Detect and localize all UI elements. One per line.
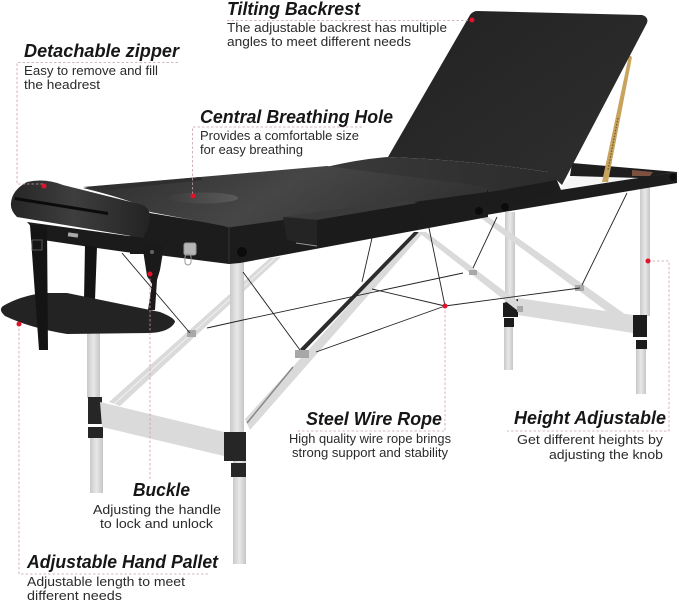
knobs: [237, 174, 676, 257]
breathing hole: [168, 192, 238, 204]
callout: buckle: Adjusting the handle: [93, 502, 221, 517]
left back leg: [87, 330, 103, 493]
front left leg: [224, 258, 246, 564]
back middle leg: [503, 212, 518, 370]
callout: tilting backrest: [227, 0, 447, 49]
callout: tilting backrest: The adjustable backrest has multiple: [227, 20, 447, 35]
callout: detachable zipper: Detachable zipper: [24, 41, 180, 61]
callout: central breathing hole: Central Breathing Hole: [200, 107, 393, 127]
adjustable hand pallet back strap: [84, 245, 97, 300]
callout: adjustable hand pallet: [26, 552, 219, 602]
adjustable hand pallet: [1, 293, 175, 334]
callout: central breathing hole: [200, 107, 393, 157]
callout: buckle: Buckle: [133, 480, 190, 500]
tilting backrest cushion: [388, 11, 647, 185]
callout: adjustable hand pallet: Adjustable Hand Pallet: [26, 552, 219, 572]
callout: tilting backrest: angles to meet different needs: [227, 34, 412, 49]
callout: central breathing hole: Provides a comfortable size: [200, 128, 359, 143]
zipper hook: [184, 243, 196, 265]
seat section cushion: [326, 157, 561, 215]
central table section: [83, 166, 488, 264]
left diagonal brace: [109, 257, 281, 406]
callout: height adjustable: Get different heights by: [517, 432, 664, 447]
callout: steel wire rope: Steel Wire Rope: [306, 409, 442, 429]
callout: height adjustable: adjusting the knob: [549, 447, 663, 462]
callout: steel wire rope: strong support and stability: [292, 445, 448, 460]
steel wire ropes: [122, 193, 627, 352]
straps: [30, 225, 48, 350]
callout: detachable zipper: the headrest: [24, 77, 100, 92]
centre brace lower: [245, 232, 424, 430]
far right leg: [633, 186, 650, 394]
centre brace right: [418, 232, 520, 311]
callout: steel wire rope: High quality wire rope brings: [289, 431, 451, 446]
rear frame: [486, 163, 677, 215]
callout: detachable zipper: Easy to remove and fill: [24, 63, 158, 78]
wooden support strut: [602, 55, 632, 182]
callout: height adjustable: Height Adjustable: [514, 408, 666, 428]
bolster pillow: [283, 200, 418, 246]
callout: detachable zipper: [24, 41, 180, 92]
buckle: [143, 243, 163, 310]
front rail: [100, 402, 224, 456]
table legs and frame: [87, 186, 650, 564]
callout: central breathing hole: for easy breathing: [200, 142, 303, 157]
back rail right: [518, 298, 633, 333]
callout: steel wire rope: [289, 409, 451, 460]
callout: height adjustable: [514, 408, 666, 462]
callout: buckle: to lock and unlock: [100, 516, 214, 531]
headrest: [11, 177, 203, 254]
callout: buckle: [93, 480, 221, 531]
brace brackets: [187, 270, 584, 358]
marker dots: [16, 18, 650, 326]
right brace: [478, 216, 636, 330]
callout: adjustable hand pallet: Adjustable length to meet: [27, 574, 185, 589]
